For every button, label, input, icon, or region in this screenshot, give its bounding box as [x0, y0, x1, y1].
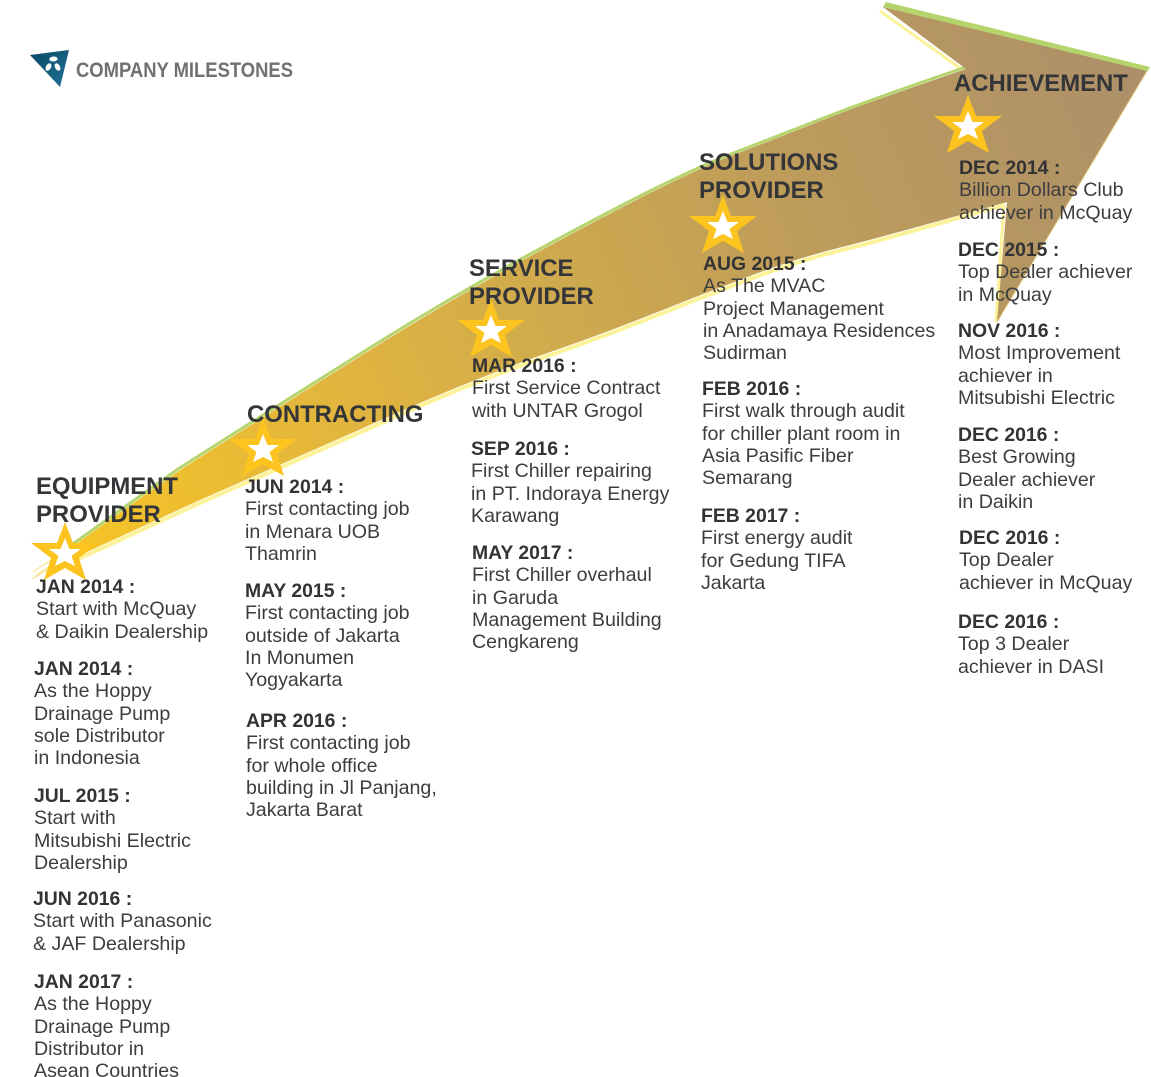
milestone: May 2015: outside of Jakarta: [245, 624, 400, 646]
milestone: Jan 2014 McQuay: JAN 2014 :: [36, 576, 135, 598]
milestone: Dec 2016 DASI: DEC 2016 :: [958, 611, 1059, 633]
milestone: Dec 2016 McQuay: Top Dealer: [959, 549, 1054, 571]
heading: service provider: SERVICE: [469, 255, 573, 282]
milestone: Jul 2015: Mitsubishi Electric: [34, 830, 191, 852]
milestone: Apr 2016: for whole office: [246, 754, 378, 776]
heading: equipment provider: [36, 473, 178, 528]
milestone: Jun 2014: Thamrin: [245, 543, 317, 565]
milestone: Jan 2017: JAN 2017 :: [34, 971, 133, 993]
milestone: May 2017: in Garuda: [472, 586, 558, 608]
milestone: Jul 2015: JUL 2015 :: [34, 785, 131, 807]
heading: service provider: [469, 255, 594, 310]
milestone: May 2017: Management Building: [472, 609, 662, 631]
milestone: Aug 2015: Project Management: [703, 298, 884, 320]
milestone: Jun 2016: JUN 2016 :: [33, 888, 132, 910]
milestone: May 2017: First Chiller overhaul: [472, 564, 652, 586]
milestone: Dec 2014: DEC 2014 :: [959, 157, 1060, 179]
star: achievement: [934, 95, 1002, 153]
milestone: May 2015: In Monumen: [245, 647, 354, 669]
milestone: Aug 2015: Sudirman: [703, 342, 787, 364]
milestone: Feb 2016: Semarang: [702, 467, 792, 489]
yellow lower edge: [62, 205, 1004, 565]
milestone: Jan 2017: [34, 971, 179, 1077]
growth arrow: [32, 2, 1150, 579]
star: equipment provider: [31, 522, 99, 580]
milestone: May 2015: MAY 2015 :: [245, 580, 346, 602]
milestone: Dec 2016 Daikin: Best Growing: [958, 446, 1076, 468]
title: COMPANY MILESTONES: [76, 59, 293, 82]
heading: solutions provider: [699, 149, 838, 204]
milestone: Feb 2017: FEB 2017 :: [701, 505, 800, 527]
milestone: Jan 2017: Drainage Pump: [34, 1016, 170, 1038]
milestone: Jul 2015: [34, 785, 191, 874]
milestone: May 2017: MAY 2017 :: [472, 542, 573, 564]
milestone: Jun 2014: JUN 2014 :: [245, 476, 344, 498]
milestone: May 2015: Yogyakarta: [245, 669, 342, 691]
milestone: Jan 2014 McQuay: [36, 576, 208, 642]
milestone: Dec 2016 McQuay: achiever in McQuay: [959, 572, 1132, 594]
milestone: Mar 2016: MAR 2016 :: [472, 355, 577, 377]
milestone: Nov 2016: NOV 2016 :: [958, 320, 1060, 342]
milestone: Jun 2014: First contacting job: [245, 498, 410, 520]
milestone: May 2015: [245, 580, 410, 691]
milestone: Jan 2014 Hoppy: Drainage Pump: [34, 702, 170, 724]
milestone: Dec 2016 Daikin: in Daikin: [958, 491, 1033, 513]
milestone: Jun 2016: [33, 888, 212, 954]
milestone: Feb 2016: Asia Pasific Fiber: [702, 445, 853, 467]
milestone: Dec 2016 Daikin: DEC 2016 :: [958, 424, 1059, 446]
star: solutions provider: [689, 195, 757, 253]
milestone: Aug 2015: in Anadamaya Residences: [703, 320, 935, 342]
milestone: Jul 2015: Dealership: [34, 852, 128, 874]
milestone: Jul 2015: Start with: [34, 807, 116, 829]
milestone: Sep 2016: [471, 438, 670, 527]
milestone: Apr 2016: Jakarta Barat: [246, 799, 363, 821]
milestone: Sep 2016: Karawang: [471, 505, 559, 527]
milestone: Jan 2014 Hoppy: [34, 658, 170, 769]
milestone: Dec 2014: Billion Dollars Club: [959, 179, 1124, 201]
heading: achievement: ACHIEVEMENT: [954, 70, 1128, 97]
milestone: Feb 2017: for Gedung TIFA: [701, 550, 846, 572]
milestone: Mar 2016: with UNTAR Grogol: [472, 400, 643, 422]
milestone: Jan 2014 Hoppy: JAN 2014 :: [34, 658, 133, 680]
milestone: Apr 2016: First contacting job: [246, 732, 411, 754]
milestone: Dec 2016 Daikin: Dealer achiever: [958, 468, 1095, 490]
milestone: Jun 2016: Start with Panasonic: [33, 910, 212, 932]
milestone: Jan 2014 Hoppy: in Indonesia: [34, 747, 140, 769]
milestone: Jan 2017: As the Hoppy: [34, 993, 152, 1015]
milestone: Feb 2017: First energy audit: [701, 527, 852, 549]
milestone: Feb 2017: [701, 505, 852, 594]
milestone: Feb 2016: First walk through audit: [702, 400, 905, 422]
milestone: Sep 2016: in PT. Indoraya Energy: [471, 482, 669, 504]
milestone: Feb 2017: Jakarta: [701, 572, 765, 594]
milestone: Jan 2014 McQuay: & Daikin Dealership: [36, 620, 208, 642]
milestone: Apr 2016: [246, 710, 437, 821]
milestone: Aug 2015: AUG 2015 :: [703, 253, 806, 275]
icon: company logo: [30, 50, 69, 87]
milestone: Jan 2014 Hoppy: sole Distributor: [34, 725, 165, 747]
milestone: Aug 2015: [703, 253, 935, 364]
milestone: Feb 2016: for chiller plant room in: [702, 422, 900, 444]
heading: solutions provider: SOLUTIONS: [699, 149, 838, 176]
milestone: Dec 2016 DASI: Top 3 Dealer: [958, 633, 1069, 655]
milestone: Jan 2014 McQuay: Start with McQuay: [36, 598, 196, 620]
milestone: Dec 2015: DEC 2015 :: [958, 239, 1059, 261]
milestone: Mar 2016: [472, 355, 661, 422]
milestone: Apr 2016: APR 2016 :: [246, 710, 347, 732]
milestone: Dec 2016 McQuay: [959, 527, 1132, 594]
arrow body: [60, 7, 1147, 560]
milestone: Dec 2016 Daikin: [958, 424, 1095, 513]
milestone: Jun 2016: & JAF Dealership: [33, 932, 186, 954]
milestone: Sep 2016: SEP 2016 :: [471, 438, 570, 460]
green upper edge: [66, 67, 966, 548]
milestone: Sep 2016: First Chiller repairing: [471, 460, 652, 482]
heading: equipment provider: EQUIPMENT: [36, 473, 178, 500]
milestone: Aug 2015: As The MVAC: [703, 275, 825, 297]
star: contracting: [229, 418, 297, 476]
star: service provider: [457, 299, 525, 357]
milestone: Dec 2016 McQuay: DEC 2016 :: [959, 527, 1060, 549]
milestone: Jan 2014 Hoppy: As the Hoppy: [34, 680, 152, 702]
milestone: Jun 2014: in Menara UOB: [245, 520, 380, 542]
milestone: Dec 2016 DASI: achiever in DASI: [958, 656, 1104, 678]
heading: service provider: PROVIDER: [469, 282, 594, 310]
milestone: Feb 2016: [702, 378, 905, 489]
milestone: Dec 2016 DASI: [958, 611, 1104, 678]
milestone: Nov 2016: Most Improvement: [958, 342, 1120, 364]
milestone: Jan 2017: Distributor in: [34, 1038, 144, 1060]
milestone: Nov 2016: Mitsubishi Electric: [958, 387, 1115, 409]
milestone: Mar 2016: First Service Contract: [472, 377, 661, 399]
milestone: Dec 2015: in McQuay: [958, 284, 1052, 306]
milestone: Feb 2016: FEB 2016 :: [702, 378, 801, 400]
heading: contracting: CONTRACTING: [247, 401, 424, 428]
milestone: Dec 2015: [958, 239, 1132, 306]
milestone: Nov 2016: achiever in: [958, 364, 1053, 386]
milestone: May 2017: Cengkareng: [472, 631, 579, 653]
milestone: Dec 2015: Top Dealer achiever: [958, 261, 1132, 283]
milestone: May 2017: [472, 542, 662, 653]
heading: solutions provider: PROVIDER: [699, 176, 824, 204]
milestone: Apr 2016: building in Jl Panjang,: [246, 777, 437, 799]
milestone: Jun 2014: [245, 476, 410, 565]
milestone: Dec 2014: [959, 157, 1132, 224]
milestone: Dec 2014: achiever in McQuay: [959, 202, 1132, 224]
heading: equipment provider: PROVIDER: [36, 500, 161, 528]
milestone: May 2015: First contacting job: [245, 602, 410, 624]
milestone: Nov 2016: [958, 320, 1120, 409]
